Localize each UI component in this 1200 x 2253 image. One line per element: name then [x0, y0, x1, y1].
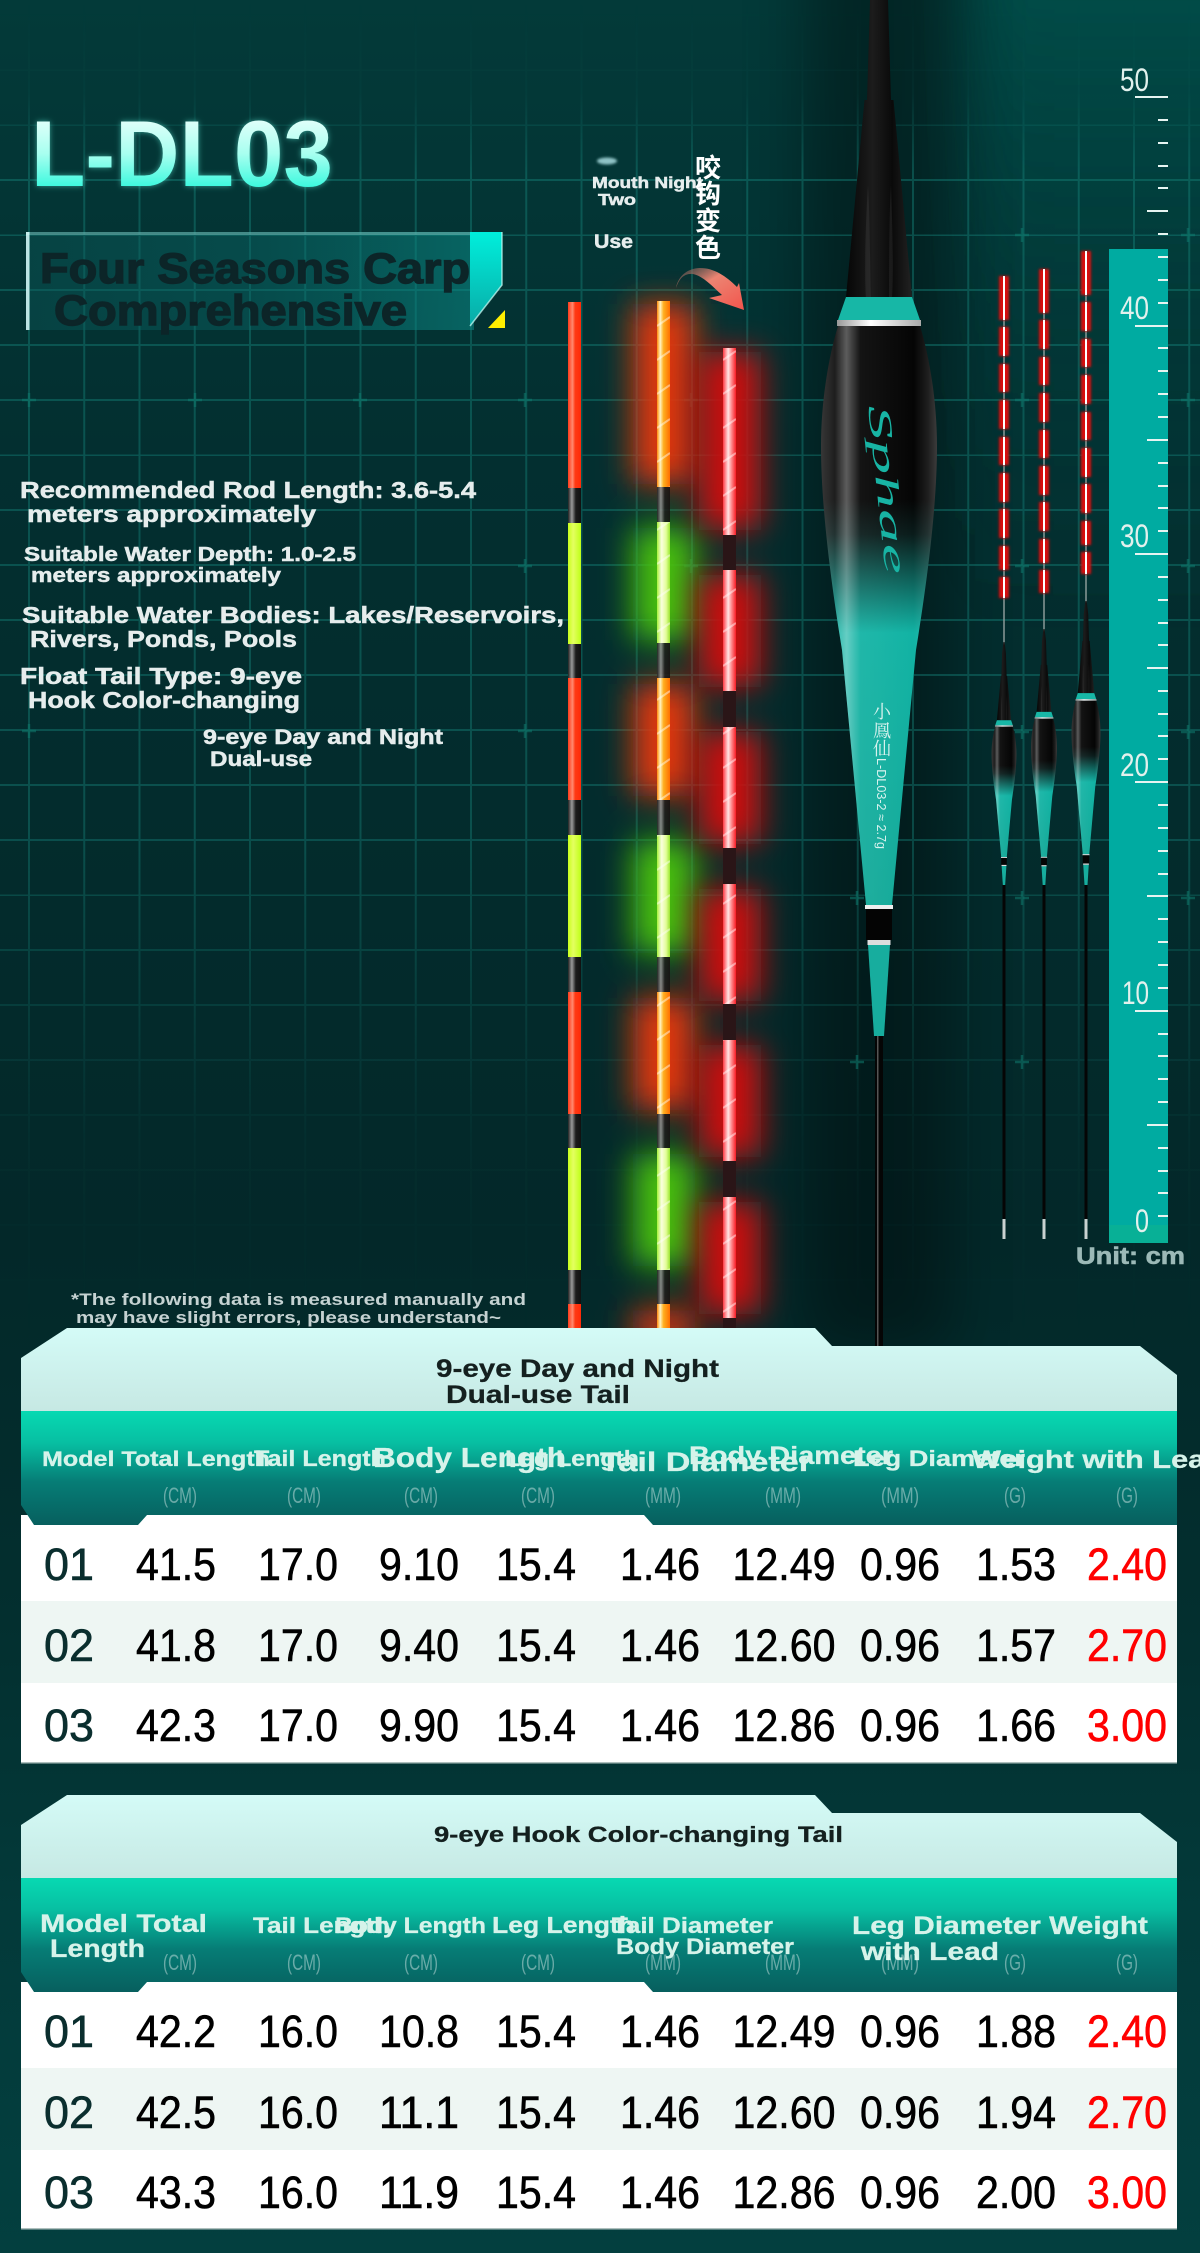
table rows — [21, 1515, 1177, 1764]
row 03: 2.00 — [976, 2167, 1056, 2218]
banner text: Four Seasons Carp — [40, 245, 470, 293]
row 02: 0.96 — [860, 2087, 940, 2138]
row 02: 11.1 — [379, 2087, 459, 2138]
label: bite hook color change: 色 — [695, 233, 721, 263]
measurement note: may have slight errors, please understand~ — [76, 1308, 501, 1327]
row 02: 02 — [44, 1620, 94, 1671]
row 03: 17.0 — [258, 1700, 338, 1751]
column headings: Leg Diameter — [853, 1446, 1026, 1471]
row 02: 0.96 — [860, 1620, 940, 1671]
column headings: Leg Length — [505, 1446, 639, 1471]
units — [163, 1483, 1138, 1508]
column headings — [42, 1442, 1200, 1477]
table header band — [21, 1878, 1177, 1992]
float model text — [873, 702, 892, 849]
row 01: 1.46 — [620, 1539, 700, 1590]
row 03: 03 — [44, 1700, 94, 1751]
units: (MM) — [765, 1950, 801, 1975]
row 01: 9.10 — [379, 1539, 459, 1590]
units: (MM) — [645, 1950, 681, 1975]
column headings: Tail Diameter — [612, 1913, 774, 1938]
row 03: 42.3 — [136, 1700, 216, 1751]
spec: day and night: 9-eye Day and Night — [203, 726, 443, 749]
row 03: 03 — [44, 2167, 94, 2218]
row 02: 12.60 — [732, 2087, 836, 2138]
spec: water bodies: Suitable Water Bodies: Lakes/Reservoirs, — [22, 602, 564, 628]
ruler labels: 40 — [1120, 290, 1149, 326]
row 01: 0.96 — [860, 1539, 940, 1590]
row 01: 17.0 — [258, 1539, 338, 1590]
table title — [436, 1355, 720, 1409]
stick: hook color-changing tail — [699, 348, 761, 1335]
units: (MM) — [881, 1483, 919, 1508]
row 01: 12.49 — [732, 1539, 836, 1590]
row 03: 0.96 — [860, 1700, 940, 1751]
units: (G) — [1004, 1483, 1026, 1508]
units: (MM) — [881, 1950, 919, 1975]
row 03: 12.86 — [732, 2167, 836, 2218]
row 01: 16.0 — [258, 2006, 338, 2057]
spec: float tail type: Hook Color-changing — [28, 687, 300, 713]
row 02 — [44, 1620, 1167, 1671]
column headings: with Lead — [860, 1938, 999, 1966]
spec: rod length: Recommended Rod Length: 3.6-5.4 — [20, 477, 476, 503]
row 02 — [44, 2087, 1167, 2138]
row 02: 1.57 — [976, 1620, 1056, 1671]
row 01: 1.46 — [620, 2006, 700, 2057]
column headings: Tail Length — [254, 1446, 386, 1471]
row 01: 15.4 — [496, 1539, 576, 1590]
stick: daytime tail — [568, 302, 581, 1334]
small float 2 — [1031, 269, 1057, 1239]
row 03 — [44, 2167, 1167, 2218]
column headings: Body Length — [335, 1913, 486, 1938]
label: mouth night two use: Use — [594, 232, 633, 253]
spec: water depth: meters approximately — [31, 565, 282, 587]
units: (CM) — [521, 1483, 555, 1508]
spec: float tail type: Float Tail Type: 9-eye — [20, 663, 302, 689]
table title: 9-eye Day and Night — [436, 1355, 720, 1383]
banner — [26, 232, 505, 335]
units: (CM) — [163, 1950, 197, 1975]
column headings: Leg Diameter Weight — [852, 1912, 1149, 1940]
table header band — [21, 1411, 1177, 1525]
label: bite hook color change — [695, 153, 721, 263]
label: mouth night two use: Two — [598, 192, 636, 209]
units: (G) — [1004, 1950, 1026, 1975]
ruler labels: 10 — [1122, 975, 1149, 1011]
column headings: Model Total Length — [42, 1448, 270, 1471]
row 03: 16.0 — [258, 2167, 338, 2218]
label: bite hook color change: 钩 — [695, 179, 721, 209]
units: (CM) — [287, 1483, 321, 1508]
row 03: 15.4 — [496, 2167, 576, 2218]
float signature: Sphae — [861, 403, 915, 576]
row 02: 1.46 — [620, 2087, 700, 2138]
table: day and night tail — [21, 1328, 1200, 1764]
spec: water bodies — [22, 602, 564, 652]
column headings: Leg Length — [492, 1912, 635, 1938]
column headings: Weight with Lead — [972, 1446, 1200, 1474]
ruler labels: 20 — [1120, 747, 1149, 783]
stick: night glowing tail — [633, 301, 695, 1344]
column headings: Body Diameter — [616, 1934, 794, 1959]
table rows — [21, 1982, 1177, 2230]
row 02: 41.8 — [136, 1620, 216, 1671]
row 03: 1.46 — [620, 1700, 700, 1751]
row 03: 1.66 — [976, 1700, 1056, 1751]
row 02: 16.0 — [258, 2087, 338, 2138]
row 01: 1.53 — [976, 1539, 1056, 1590]
column headings: Length — [50, 1935, 145, 1963]
measurement note — [71, 1290, 526, 1327]
label: mouth night two use: Mouth Night — [592, 175, 704, 192]
row 01: 41.5 — [136, 1539, 216, 1590]
label: mouth night two use — [592, 158, 704, 253]
unit label: Unit: cm — [1076, 1243, 1185, 1270]
row 01: 10.8 — [379, 2006, 459, 2057]
row 03: 3.00 — [1087, 1700, 1167, 1751]
table title panel — [21, 1795, 1177, 1879]
column headings: Tail Diameter — [600, 1447, 813, 1477]
row 03: 1.46 — [620, 2167, 700, 2218]
table title: Dual-use Tail — [446, 1381, 630, 1409]
units: (CM) — [521, 1950, 555, 1975]
row 01: 01 — [44, 2006, 94, 2057]
units — [163, 1950, 1138, 1975]
units: (MM) — [765, 1483, 801, 1508]
row 01: 01 — [44, 1539, 94, 1590]
title: L-DL03 — [31, 101, 333, 206]
main float — [821, 0, 937, 1346]
table title panel — [21, 1328, 1177, 1412]
row 02: 9.40 — [379, 1620, 459, 1671]
units: (CM) — [163, 1483, 197, 1508]
arrow — [676, 268, 744, 310]
ruler labels: 50 — [1120, 62, 1149, 98]
banner text — [40, 245, 470, 335]
row 03: 9.90 — [379, 1700, 459, 1751]
row 02: 15.4 — [496, 2087, 576, 2138]
row 01: 2.40 — [1087, 1539, 1167, 1590]
label: bite hook color change: 变 — [695, 206, 721, 236]
table: hook color-changing tail — [21, 1795, 1177, 2230]
column headings: Model Total — [40, 1910, 207, 1938]
row 03: 11.9 — [379, 2167, 459, 2218]
row 02: 42.5 — [136, 2087, 216, 2138]
row 03: 12.86 — [732, 1700, 836, 1751]
ruler — [1109, 62, 1168, 1243]
row 02: 17.0 — [258, 1620, 338, 1671]
row 02: 2.70 — [1087, 1620, 1167, 1671]
row 02: 2.70 — [1087, 2087, 1167, 2138]
row 01: 2.40 — [1087, 2006, 1167, 2057]
row 01 — [44, 1539, 1167, 1590]
units: (G) — [1116, 1950, 1138, 1975]
ruler labels: 30 — [1120, 518, 1149, 554]
row 02: 02 — [44, 2087, 94, 2138]
ruler labels: 0 — [1135, 1203, 1149, 1239]
row 02: 12.60 — [732, 1620, 836, 1671]
column headings: Body Length — [373, 1442, 566, 1473]
ruler labels — [1120, 62, 1149, 1239]
spec: water depth: Suitable Water Depth: 1.0-2.5 — [24, 544, 356, 566]
row 02: 1.46 — [620, 1620, 700, 1671]
spec: water bodies: Rivers, Ponds, Pools — [30, 626, 297, 652]
row 01 — [44, 2006, 1167, 2057]
column headings: Body Diameter — [689, 1442, 893, 1470]
float model text: L-DL03-2 ≈ 2.7g — [874, 758, 889, 849]
row 01: 15.4 — [496, 2006, 576, 2057]
row 03: 3.00 — [1087, 2167, 1167, 2218]
spec: day and night — [203, 726, 443, 771]
units: (CM) — [404, 1483, 438, 1508]
spec: day and night: Dual-use — [210, 748, 312, 771]
label: bite hook color change: 咬 — [695, 153, 721, 183]
spec: float tail type — [20, 663, 302, 713]
float model text: 仙 — [873, 739, 891, 759]
row 03: 15.4 — [496, 1700, 576, 1751]
units: (MM) — [645, 1483, 681, 1508]
spec: water depth — [24, 544, 356, 587]
units: (G) — [1116, 1483, 1138, 1508]
spec: rod length — [20, 477, 476, 527]
row 02: 1.94 — [976, 2087, 1056, 2138]
row 03: 0.96 — [860, 2167, 940, 2218]
row 01: 42.2 — [136, 2006, 216, 2057]
measurement note: *The following data is measured manually and — [71, 1290, 526, 1309]
row 03: 43.3 — [136, 2167, 216, 2218]
banner text: Comprehensive — [54, 287, 407, 335]
row 01: 1.88 — [976, 2006, 1056, 2057]
units: (CM) — [287, 1950, 321, 1975]
float model text: 小 — [873, 702, 892, 722]
table title: 9-eye Hook Color-changing Tail — [434, 1822, 843, 1847]
row 01: 12.49 — [732, 2006, 836, 2057]
column headings — [40, 1910, 1149, 1966]
row 03 — [44, 1700, 1167, 1751]
row 01: 0.96 — [860, 2006, 940, 2057]
float model text: 鳳 — [873, 721, 891, 741]
row 02: 15.4 — [496, 1620, 576, 1671]
column headings: Tail Length — [253, 1913, 390, 1938]
small float 1 — [992, 276, 1016, 1239]
units: (CM) — [404, 1950, 438, 1975]
spec: rod length: meters approximately — [27, 501, 316, 527]
small float 3 — [1072, 251, 1100, 1239]
